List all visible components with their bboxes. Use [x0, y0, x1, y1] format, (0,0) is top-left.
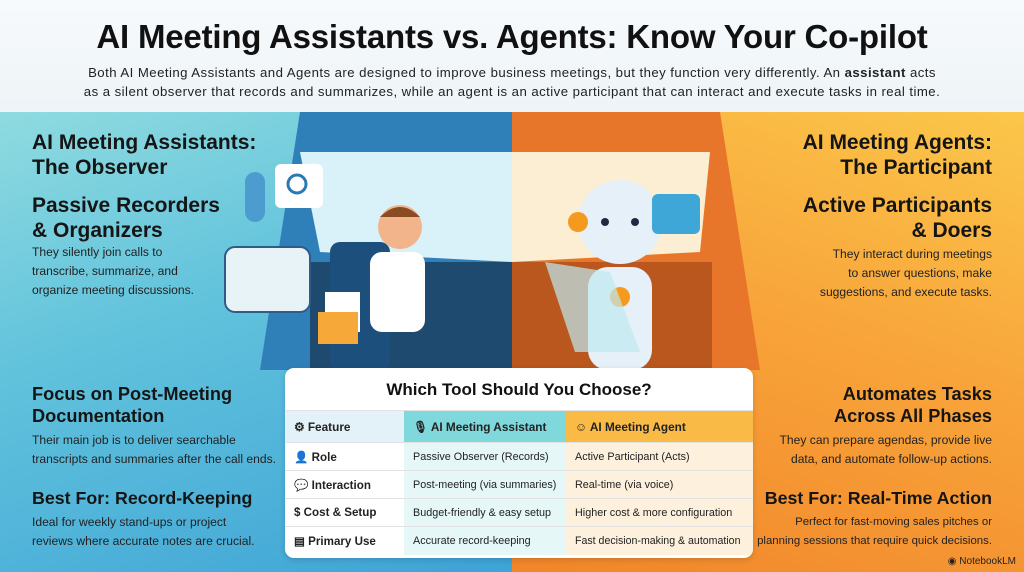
subtitle: Both AI Meeting Assistants and Agents are designed to improve business meetings, but they function very differently. An assistant acts [88, 65, 936, 80]
left focus [32, 384, 232, 426]
header background [0, 0, 1024, 112]
right body: suggestions, and execute tasks. [820, 285, 992, 299]
left heading: The Observer [32, 156, 167, 179]
left heading: AI Meeting Assistants: [32, 131, 256, 154]
icon: search bubble [275, 164, 323, 208]
holo screen [545, 262, 640, 352]
right best for: Best For: Real-Time Action [765, 488, 992, 508]
right body: They interact during meetings [833, 247, 992, 261]
left best body [32, 515, 254, 548]
comparison table: Higher cost & more configuration [575, 506, 732, 518]
right automates body: data, and automate follow-up actions. [791, 452, 992, 466]
right heading: The Participant [840, 156, 992, 179]
comparison table: Real-time (via voice) [575, 478, 673, 490]
left focus: Documentation [32, 406, 164, 426]
right best body [757, 516, 992, 547]
comparison table: Budget-friendly & easy setup [413, 506, 551, 518]
left panel background [0, 112, 512, 572]
left body: organize meeting discussions. [32, 283, 194, 297]
right best body: planning sessions that require quick decisions. [757, 535, 992, 547]
left subheading: & Organizers [32, 219, 163, 242]
right automates: Automates Tasks [843, 384, 992, 404]
left body: transcribe, summarize, and [32, 264, 178, 278]
right best body: Perfect for fast-moving sales pitches or [795, 516, 992, 528]
comparison table: Post-meeting (via summaries) [413, 478, 556, 490]
comparison table: Active Participant (Acts) [575, 450, 690, 462]
right heading [803, 131, 992, 179]
comparison table: 💬 Interaction [294, 478, 371, 492]
comparison table: ☺ AI Meeting Agent [575, 420, 686, 434]
left body: They silently join calls to [32, 245, 162, 259]
comparison table: 🎙 AI Meeting Assistant [413, 420, 546, 434]
right heading: AI Meeting Agents: [803, 131, 992, 154]
right automates body [780, 433, 992, 466]
cockpit illustration [224, 112, 760, 370]
title: AI Meeting Assistants vs. Agents: Know Your Co-pilot [96, 18, 928, 55]
watermark: ◉ NotebookLM [948, 556, 1016, 567]
right panel background [512, 112, 1024, 572]
robot [568, 180, 672, 370]
comparison table: Passive Observer (Records) [413, 450, 549, 462]
left focus: Focus on Post-Meeting [32, 384, 232, 404]
comparison table: Accurate record-keeping [413, 535, 531, 547]
left focus body [32, 433, 276, 466]
left focus body: Their main job is to deliver searchable [32, 433, 236, 447]
comparison table: Fast decision-making & automation [575, 535, 740, 547]
comparison table [285, 368, 753, 558]
right body: to answer questions, make [848, 266, 992, 280]
comparison table: 👤 Role [294, 450, 337, 464]
right body [820, 247, 992, 299]
table title: Which Tool Should You Choose? [386, 380, 652, 399]
right automates body: They can prepare agendas, provide live [780, 433, 992, 447]
left subheading: Passive Recorders [32, 194, 220, 217]
left body [32, 245, 194, 297]
comparison table: ⚙ Feature [294, 420, 350, 434]
recorder device [225, 172, 360, 344]
right subheading: & Doers [911, 219, 992, 242]
right subheading: Active Participants [803, 194, 992, 217]
comparison table: $ Cost & Setup [294, 506, 376, 519]
left best body: reviews where accurate notes are crucial. [32, 534, 254, 548]
pilot [330, 205, 425, 370]
comparison table: ▤ Primary Use [294, 535, 376, 548]
left focus body: transcripts and summaries after the call ends. [32, 452, 276, 466]
left best for: Best For: Record-Keeping [32, 488, 252, 508]
left subheading [32, 194, 220, 242]
right automates [834, 384, 992, 426]
subtitle: as a silent observer that records and summarizes, while an agent is an active participant that can interact and execute tasks in real time. [84, 84, 940, 99]
right automates: Across All Phases [834, 406, 992, 426]
left heading [32, 131, 256, 179]
icon: chat bubble [652, 194, 700, 234]
subtitle [84, 65, 940, 99]
right subheading [803, 194, 992, 242]
left best body: Ideal for weekly stand-ups or project [32, 515, 226, 529]
